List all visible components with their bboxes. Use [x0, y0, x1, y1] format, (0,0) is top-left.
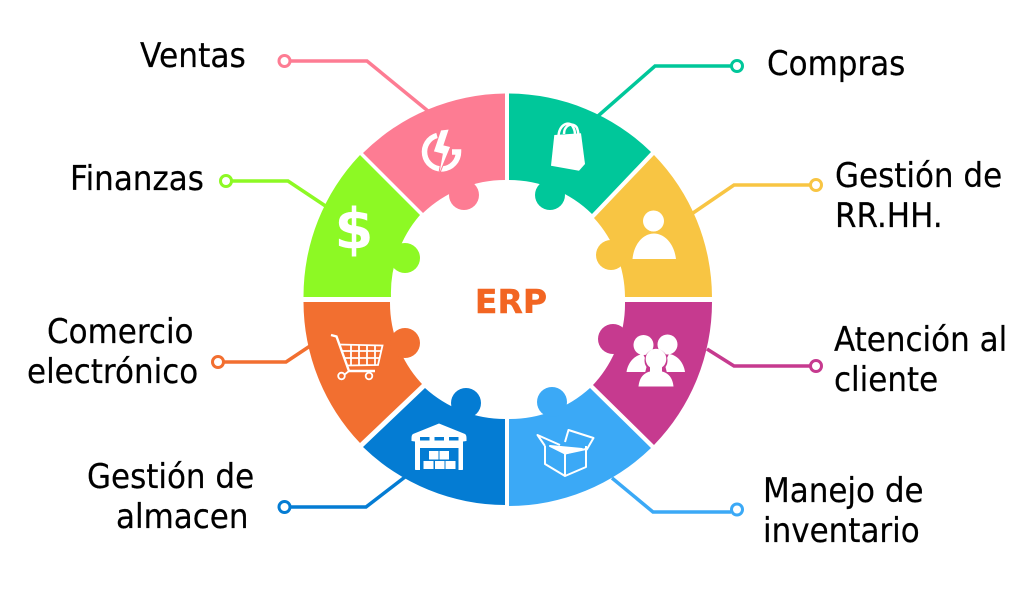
label: Comercio electrónico: electrónico — [27, 352, 198, 391]
connectors — [212, 56, 822, 515]
label: Comercio electrónico: Comercio — [47, 312, 194, 351]
connector: Atención al cliente — [707, 349, 822, 372]
icon: shopping bag — [551, 124, 585, 171]
label: Manejo de inventario — [763, 471, 924, 550]
label: Comercio electrónico — [27, 312, 198, 391]
connector: Comercio electrónico — [212, 346, 310, 368]
label: Atención al cliente: Atención al — [834, 320, 1007, 359]
connector: Ventas — [279, 56, 428, 111]
connector: Compras — [598, 60, 742, 116]
connector: Finanzas — [220, 176, 327, 207]
label: Atención al cliente — [834, 320, 1007, 399]
label: Ventas: Ventas — [140, 36, 246, 75]
icon: shopping cart — [331, 335, 382, 379]
label: Atención al cliente: cliente — [834, 360, 938, 399]
icon: person — [632, 210, 676, 259]
segment: Comercio electrónico — [304, 302, 422, 443]
segment: Manejo de inventario — [509, 387, 651, 506]
connector: Gestión de almacen — [279, 477, 405, 512]
puzzle ring — [303, 94, 712, 506]
label: Gestión de almacen — [87, 457, 254, 536]
icon: warehouse — [412, 424, 466, 470]
connector: Gestión de RR.HH. — [693, 180, 822, 213]
icon: dollar sign: $ — [335, 197, 373, 262]
icon: group of people — [626, 334, 685, 386]
label: Gestión de RR.HH. — [835, 156, 1002, 235]
label: Compras: Compras — [767, 44, 905, 83]
label: Gestión de almacen: Gestión de — [87, 457, 254, 496]
connector: Manejo de inventario — [612, 478, 742, 515]
label: Manejo de inventario: inventario — [763, 511, 920, 550]
label: Finanzas: Finanzas — [70, 159, 204, 198]
icon: open box — [538, 430, 594, 476]
segment: Gestión de RR.HH. — [594, 155, 712, 297]
segment: Finanzas — [303, 155, 420, 297]
label: Gestión de RR.HH.: RR.HH. — [835, 196, 943, 235]
label: Gestión de almacen: almacen — [116, 497, 249, 536]
icon: lightning circle — [425, 129, 458, 177]
segment: Compras — [509, 94, 651, 214]
center title: ERP: ERP — [475, 282, 547, 321]
label: Gestión de RR.HH.: Gestión de — [835, 156, 1002, 195]
label: Manejo de inventario: Manejo de — [763, 471, 924, 510]
segment: Ventas — [363, 94, 505, 213]
segment: Atención al cliente — [593, 302, 712, 445]
segment: Gestión de almacen — [363, 388, 505, 505]
